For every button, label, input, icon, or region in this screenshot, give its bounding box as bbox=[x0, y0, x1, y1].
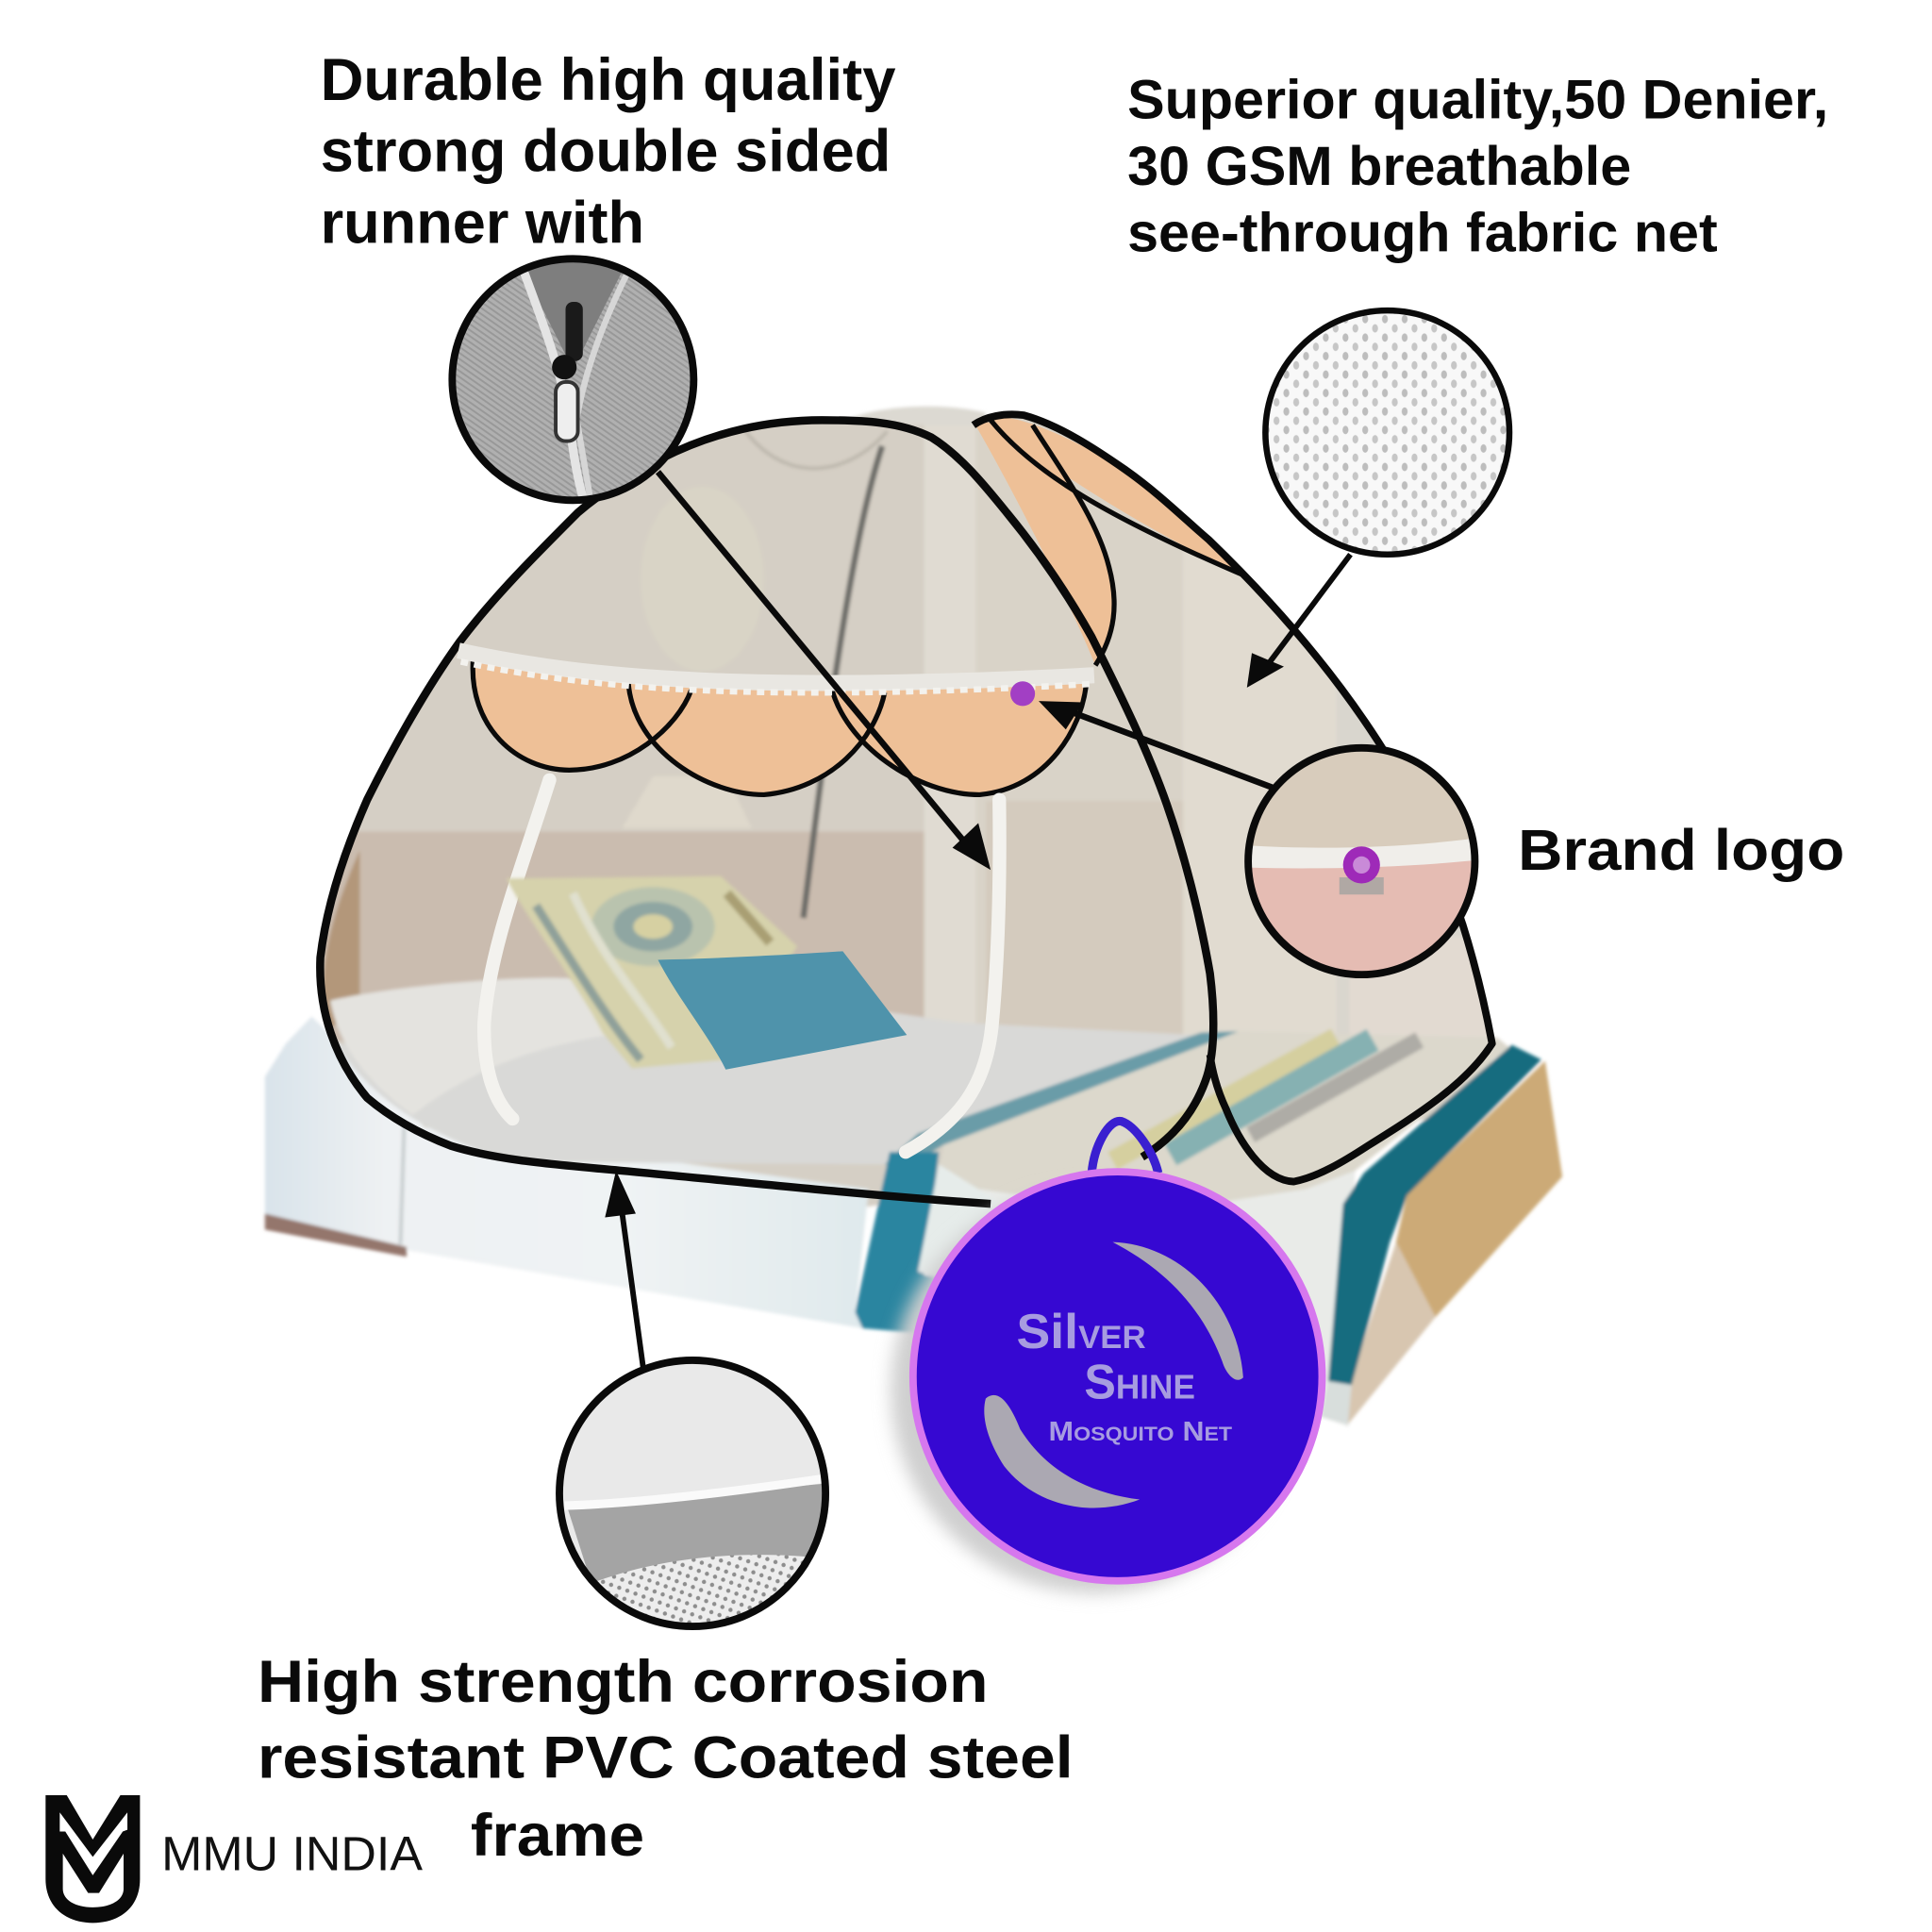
main tent outline bbox=[320, 420, 1213, 1204]
bed teal side bbox=[1328, 1045, 1541, 1385]
callout text: frame: frame bbox=[471, 1803, 644, 1869]
net panel: side tent outline bbox=[974, 414, 1492, 1182]
callout text: fabric: see-through fabric net bbox=[1127, 202, 1718, 263]
callout text: runner: strong double sided bbox=[321, 119, 891, 185]
callout text: runner: Durable high quality bbox=[321, 47, 896, 113]
white bolster pillow bbox=[330, 978, 610, 1115]
brand logo on trim bbox=[1010, 681, 1035, 706]
callout text: fabric bbox=[1127, 69, 1828, 263]
detail circle: mesh fabric bbox=[1265, 310, 1509, 555]
lace trim bbox=[458, 651, 1094, 692]
back pole bbox=[804, 446, 882, 918]
blanket bbox=[937, 1031, 1509, 1214]
bag brand text: SilVER bbox=[1017, 1305, 1146, 1359]
blue pillow bbox=[658, 951, 907, 1070]
callout text: fabric: Superior quality,50 Denier, bbox=[1127, 69, 1828, 130]
bag crescent top bbox=[1112, 1242, 1243, 1380]
bag crescent bottom bbox=[984, 1395, 1140, 1507]
white panel in teal band bbox=[918, 1164, 998, 1293]
bed grey corner bbox=[1321, 1381, 1352, 1424]
storage bag bbox=[891, 1121, 1322, 1593]
arrow to side runner bbox=[658, 472, 991, 870]
mattress top bbox=[339, 979, 1195, 1164]
MMU logo mark bbox=[45, 1794, 140, 1923]
white poles bbox=[484, 780, 1000, 1152]
bag brand text bbox=[1017, 1305, 1232, 1447]
bag brand text: SHINE bbox=[1084, 1355, 1195, 1409]
bag brand text: MOSQUITO NET bbox=[1049, 1417, 1232, 1447]
teal blanket band front bbox=[855, 1152, 974, 1337]
callout text: runner: runner with bbox=[321, 190, 644, 256]
callout text: brand logo: Brand logo bbox=[1518, 818, 1844, 883]
thin arch on wall bbox=[745, 431, 887, 468]
flap outlines bbox=[991, 420, 1247, 665]
bed tan side bbox=[1396, 1061, 1562, 1317]
arrow to fabric bbox=[1247, 555, 1351, 688]
orange top flap bbox=[974, 417, 1247, 665]
bed slats bbox=[265, 1214, 407, 1257]
callout text: frame bbox=[258, 1649, 1074, 1869]
bed front side bbox=[265, 1017, 869, 1328]
callout text: runner bbox=[321, 47, 896, 256]
detail circle: brand logo bbox=[1244, 740, 1478, 989]
arrow to frame bbox=[605, 1171, 643, 1368]
teal blanket band top bbox=[885, 1031, 1239, 1164]
wall peak behind tent bbox=[838, 407, 986, 456]
bag shadow bbox=[891, 1187, 1297, 1593]
blanket stripes bbox=[1112, 1038, 1336, 1160]
bag disc bbox=[913, 1172, 1322, 1581]
patterned pillow bbox=[507, 876, 797, 1068]
callout text: fabric: 30 GSM breathable bbox=[1127, 136, 1631, 197]
arrow to brand logo bbox=[1039, 701, 1275, 789]
white bed sheet side bbox=[937, 1146, 1356, 1426]
watermark text: MMU INDIA bbox=[161, 1827, 423, 1881]
bag handle bbox=[1091, 1121, 1158, 1173]
bed beige side bbox=[1348, 1242, 1436, 1424]
detail circle: frame edge bbox=[555, 1356, 832, 1639]
detail circle: zipper bbox=[452, 258, 693, 506]
orange flap lobes bbox=[473, 659, 1087, 794]
wall inside tent bbox=[308, 394, 1541, 1208]
bed front seam bbox=[400, 1127, 404, 1244]
photo scene: wall and bed bbox=[265, 394, 1562, 1426]
callout text: frame: resistant PVC Coated steel bbox=[258, 1725, 1074, 1791]
callout text: frame: High strength corrosion bbox=[258, 1649, 989, 1715]
